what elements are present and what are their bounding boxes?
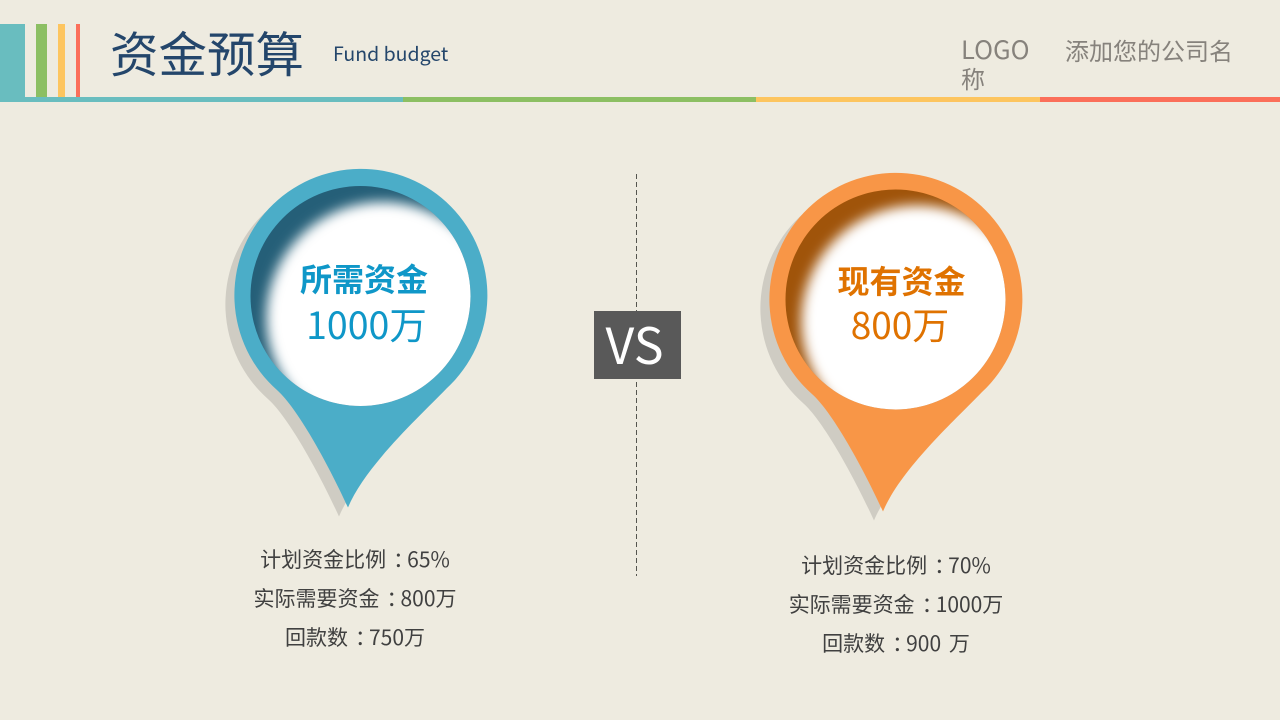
header accent stripes — [0, 24, 80, 97]
blue pin — [225, 169, 498, 516]
right details: 回款数 ：900 万 — [822, 628, 970, 658]
VS badge — [594, 311, 681, 379]
center dashed divider — [636, 174, 637, 576]
VS badge: VS — [606, 307, 664, 379]
title: 资金预算 — [110, 16, 304, 86]
left details: 回款数 ：750万 — [285, 622, 425, 652]
orange pin heading: 现有资金 — [837, 257, 966, 303]
company name: 添加您的公司名 — [1065, 32, 1233, 67]
header rule — [0, 97, 1280, 102]
left details: 实际需要资金 ：800万 — [254, 583, 456, 613]
right details: 实际需要资金 ：1000万 — [789, 589, 1003, 619]
orange pin amount: 800万 — [851, 296, 949, 350]
right details — [789, 550, 1003, 658]
logo placeholder: LOGO — [961, 30, 1030, 67]
blue pin amount: 1000万 — [306, 295, 427, 350]
left details — [254, 544, 456, 652]
pin graphics — [226, 168, 1022, 520]
blue pin heading: 所需资金 — [300, 255, 428, 301]
logo placeholder: 称 — [961, 60, 985, 95]
subtitle: Fund budget — [333, 38, 448, 67]
orange pin — [760, 173, 1034, 520]
logo placeholder — [961, 30, 1030, 95]
right details: 计划资金比例 ：70% — [801, 550, 991, 580]
left details: 计划资金比例 ：65% — [260, 544, 450, 574]
